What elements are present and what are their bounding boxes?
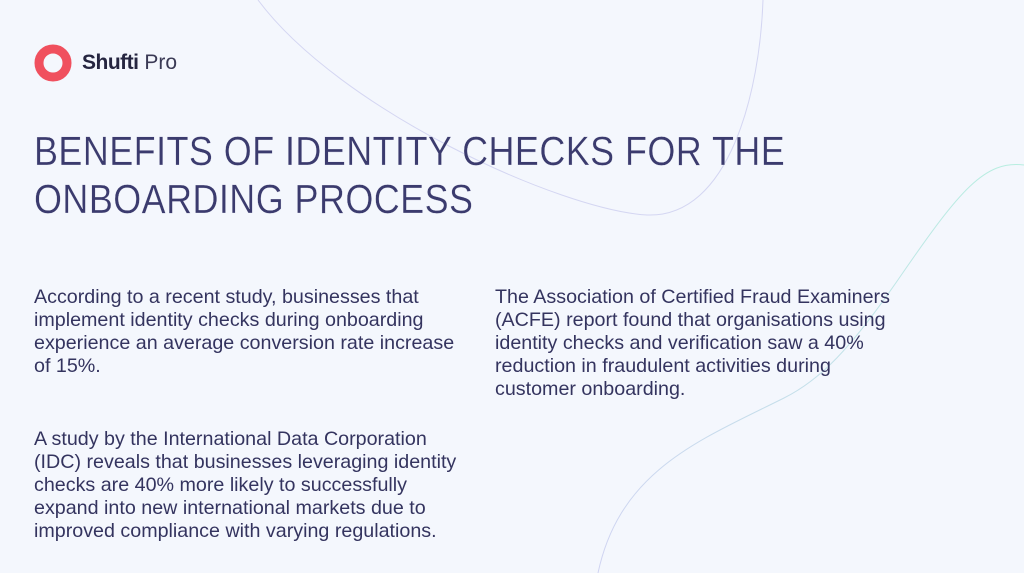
text block: IDC: checks are 40% more likely to successfully [34,474,407,496]
text block: ACFE: (ACFE) report found that organisations using [495,309,886,331]
text block: IDC: A study by the International Data Corporation [34,428,427,450]
text block: ACFE [495,286,890,400]
text block: ACFE: reduction in fraudulent activities during [495,355,831,377]
title: ONBOARDING PROCESS [34,176,473,222]
text block: ACFE: identity checks and verification saw a 40% [495,332,864,354]
text block: IDC: improved compliance with varying regulations. [34,520,437,542]
text block: IDC: expand into new international markets due to [34,497,426,519]
text block: conversion: According to a recent study, businesses that [34,286,419,308]
logo [34,44,177,82]
text block: ACFE: customer onboarding. [495,378,685,400]
text block: conversion: implement identity checks during onboarding [34,309,423,331]
text block: conversion [34,286,454,377]
title [34,128,785,222]
logo text: Shufti Pro [82,51,177,74]
icon: logo ring [34,44,72,82]
title: BENEFITS OF IDENTITY CHECKS FOR THE [34,128,785,174]
text block: IDC [34,428,456,542]
text block: conversion: experience an average conversion rate increase [34,332,454,354]
text block: IDC: (IDC) reveals that businesses leveraging identity [34,451,456,473]
text block: conversion: of 15%. [34,355,101,377]
text block: ACFE: The Association of Certified Fraud Examiners [495,286,890,308]
